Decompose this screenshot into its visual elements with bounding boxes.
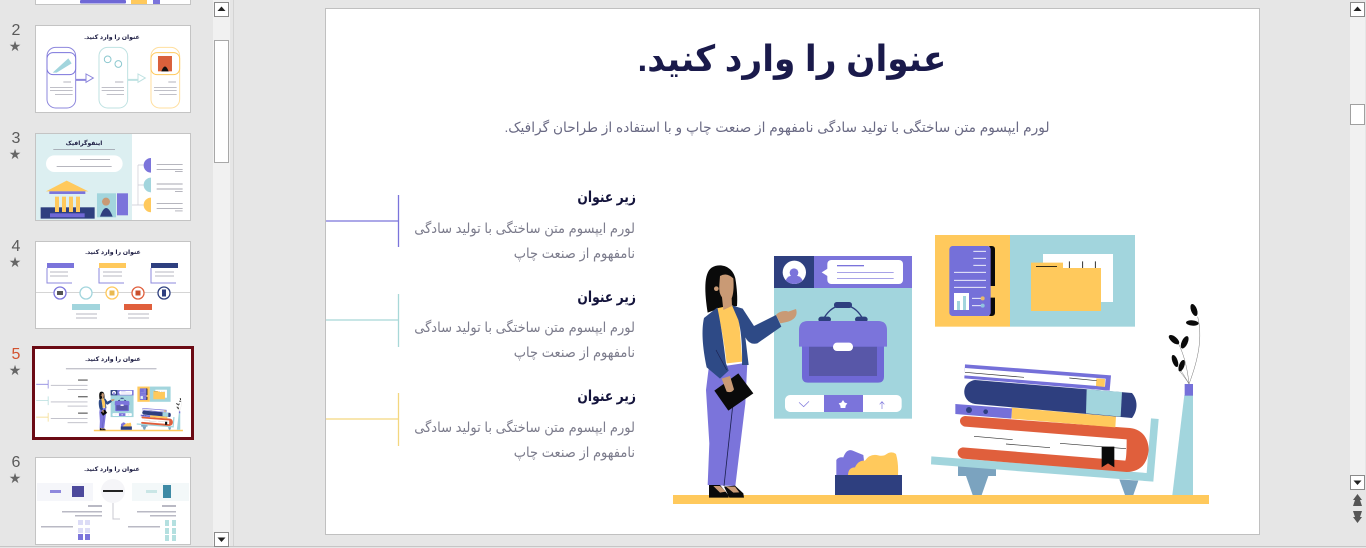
item 1 [326, 189, 636, 262]
slide numbers and stars: 2 [12, 22, 21, 39]
hair [705, 265, 737, 313]
item 3 heading: زیر عنوان [577, 388, 636, 405]
thumbnail 6 [36, 458, 190, 544]
thumbnail 4: عنوان را وارد کنید. [85, 249, 141, 256]
slide numbers and stars: 6 [12, 454, 21, 471]
navy book [964, 380, 1136, 418]
right scrollbar [1350, 2, 1365, 523]
jacket [703, 307, 729, 379]
item 1 body: لورم ایپسوم متن ساختگی با تولید سادگی [414, 220, 635, 237]
folder icon [1031, 254, 1113, 311]
thumbnail 3: اینفوگرافیک [66, 139, 102, 147]
title: عنوان را وارد کنید. [638, 39, 946, 80]
item 2 [326, 289, 636, 361]
action buttons [785, 395, 902, 412]
item 3 body: نامفهوم از صنعت چاپ [514, 445, 635, 461]
left scrollbar [213, 0, 234, 546]
potted bush [835, 450, 902, 495]
red book [958, 416, 1149, 472]
item 3 body [414, 419, 635, 461]
slide numbers and stars: ★ [9, 38, 21, 54]
connector purple [326, 195, 398, 247]
subtitle: لورم ایپسوم متن ساختگی با تولید سادگی نامفهوم از صنعت چاپ و با استفاده از طراحان گرافیک. [504, 119, 1050, 136]
thumbnail 1 remainder [36, 0, 190, 4]
shelf [931, 418, 1159, 495]
item 3 body: لورم ایپسوم متن ساختگی با تولید سادگی [414, 419, 635, 436]
vase with plant [1167, 303, 1200, 495]
document icon [949, 246, 995, 316]
item 1 body: نامفهوم از صنعت چاپ [514, 246, 635, 262]
item 2 body: لورم ایپسوم متن ساختگی با تولید سادگی [414, 319, 635, 336]
job panel [774, 256, 912, 419]
item 1 body [414, 220, 635, 262]
item 2 heading: زیر عنوان [577, 289, 636, 306]
woman presenter [703, 265, 797, 498]
item 2 body: نامفهوم از صنعت چاپ [514, 345, 635, 361]
ground bar [673, 495, 1209, 504]
tablet [714, 373, 753, 411]
thumbnail 5 selected [34, 348, 192, 438]
slide numbers and stars: 4 [12, 238, 21, 255]
slide numbers and stars: ★ [9, 146, 21, 162]
thumbnail 3 [36, 134, 190, 220]
slide canvas [326, 8, 1260, 534]
wall panel [935, 235, 1010, 327]
slide numbers and stars [9, 22, 21, 486]
pointing hand [776, 309, 797, 323]
pants [706, 363, 747, 486]
thumbnail 2: عنوان را وارد کنید. [84, 34, 140, 41]
thumbnail 5 selected: عنوان را وارد کنید. [85, 356, 141, 363]
slide numbers and stars: ★ [9, 362, 21, 378]
item 1 heading: زیر عنوان [577, 189, 636, 206]
briefcase [799, 302, 887, 383]
top purple book [964, 364, 1111, 391]
shoes [709, 485, 729, 498]
face [719, 274, 734, 310]
shirt [717, 305, 742, 363]
thumbnail 2 [36, 26, 190, 112]
slide numbers and stars: 5 [12, 346, 21, 363]
avatar [783, 261, 806, 284]
speech bubble [822, 260, 903, 284]
thumbnail 6: عنوان را وارد کنید. [84, 466, 140, 473]
illustration [673, 235, 1209, 504]
item 2 body [414, 319, 635, 361]
item 3 [326, 388, 636, 461]
slide numbers and stars: ★ [9, 470, 21, 486]
slide numbers and stars: ★ [9, 254, 21, 270]
yellow and purple book [955, 404, 1116, 427]
connector yellow [326, 393, 398, 446]
thumbnail panel [9, 0, 192, 544]
connector teal [326, 294, 398, 347]
slide numbers and stars: 3 [12, 130, 21, 147]
thumbnail 4 [36, 242, 190, 328]
